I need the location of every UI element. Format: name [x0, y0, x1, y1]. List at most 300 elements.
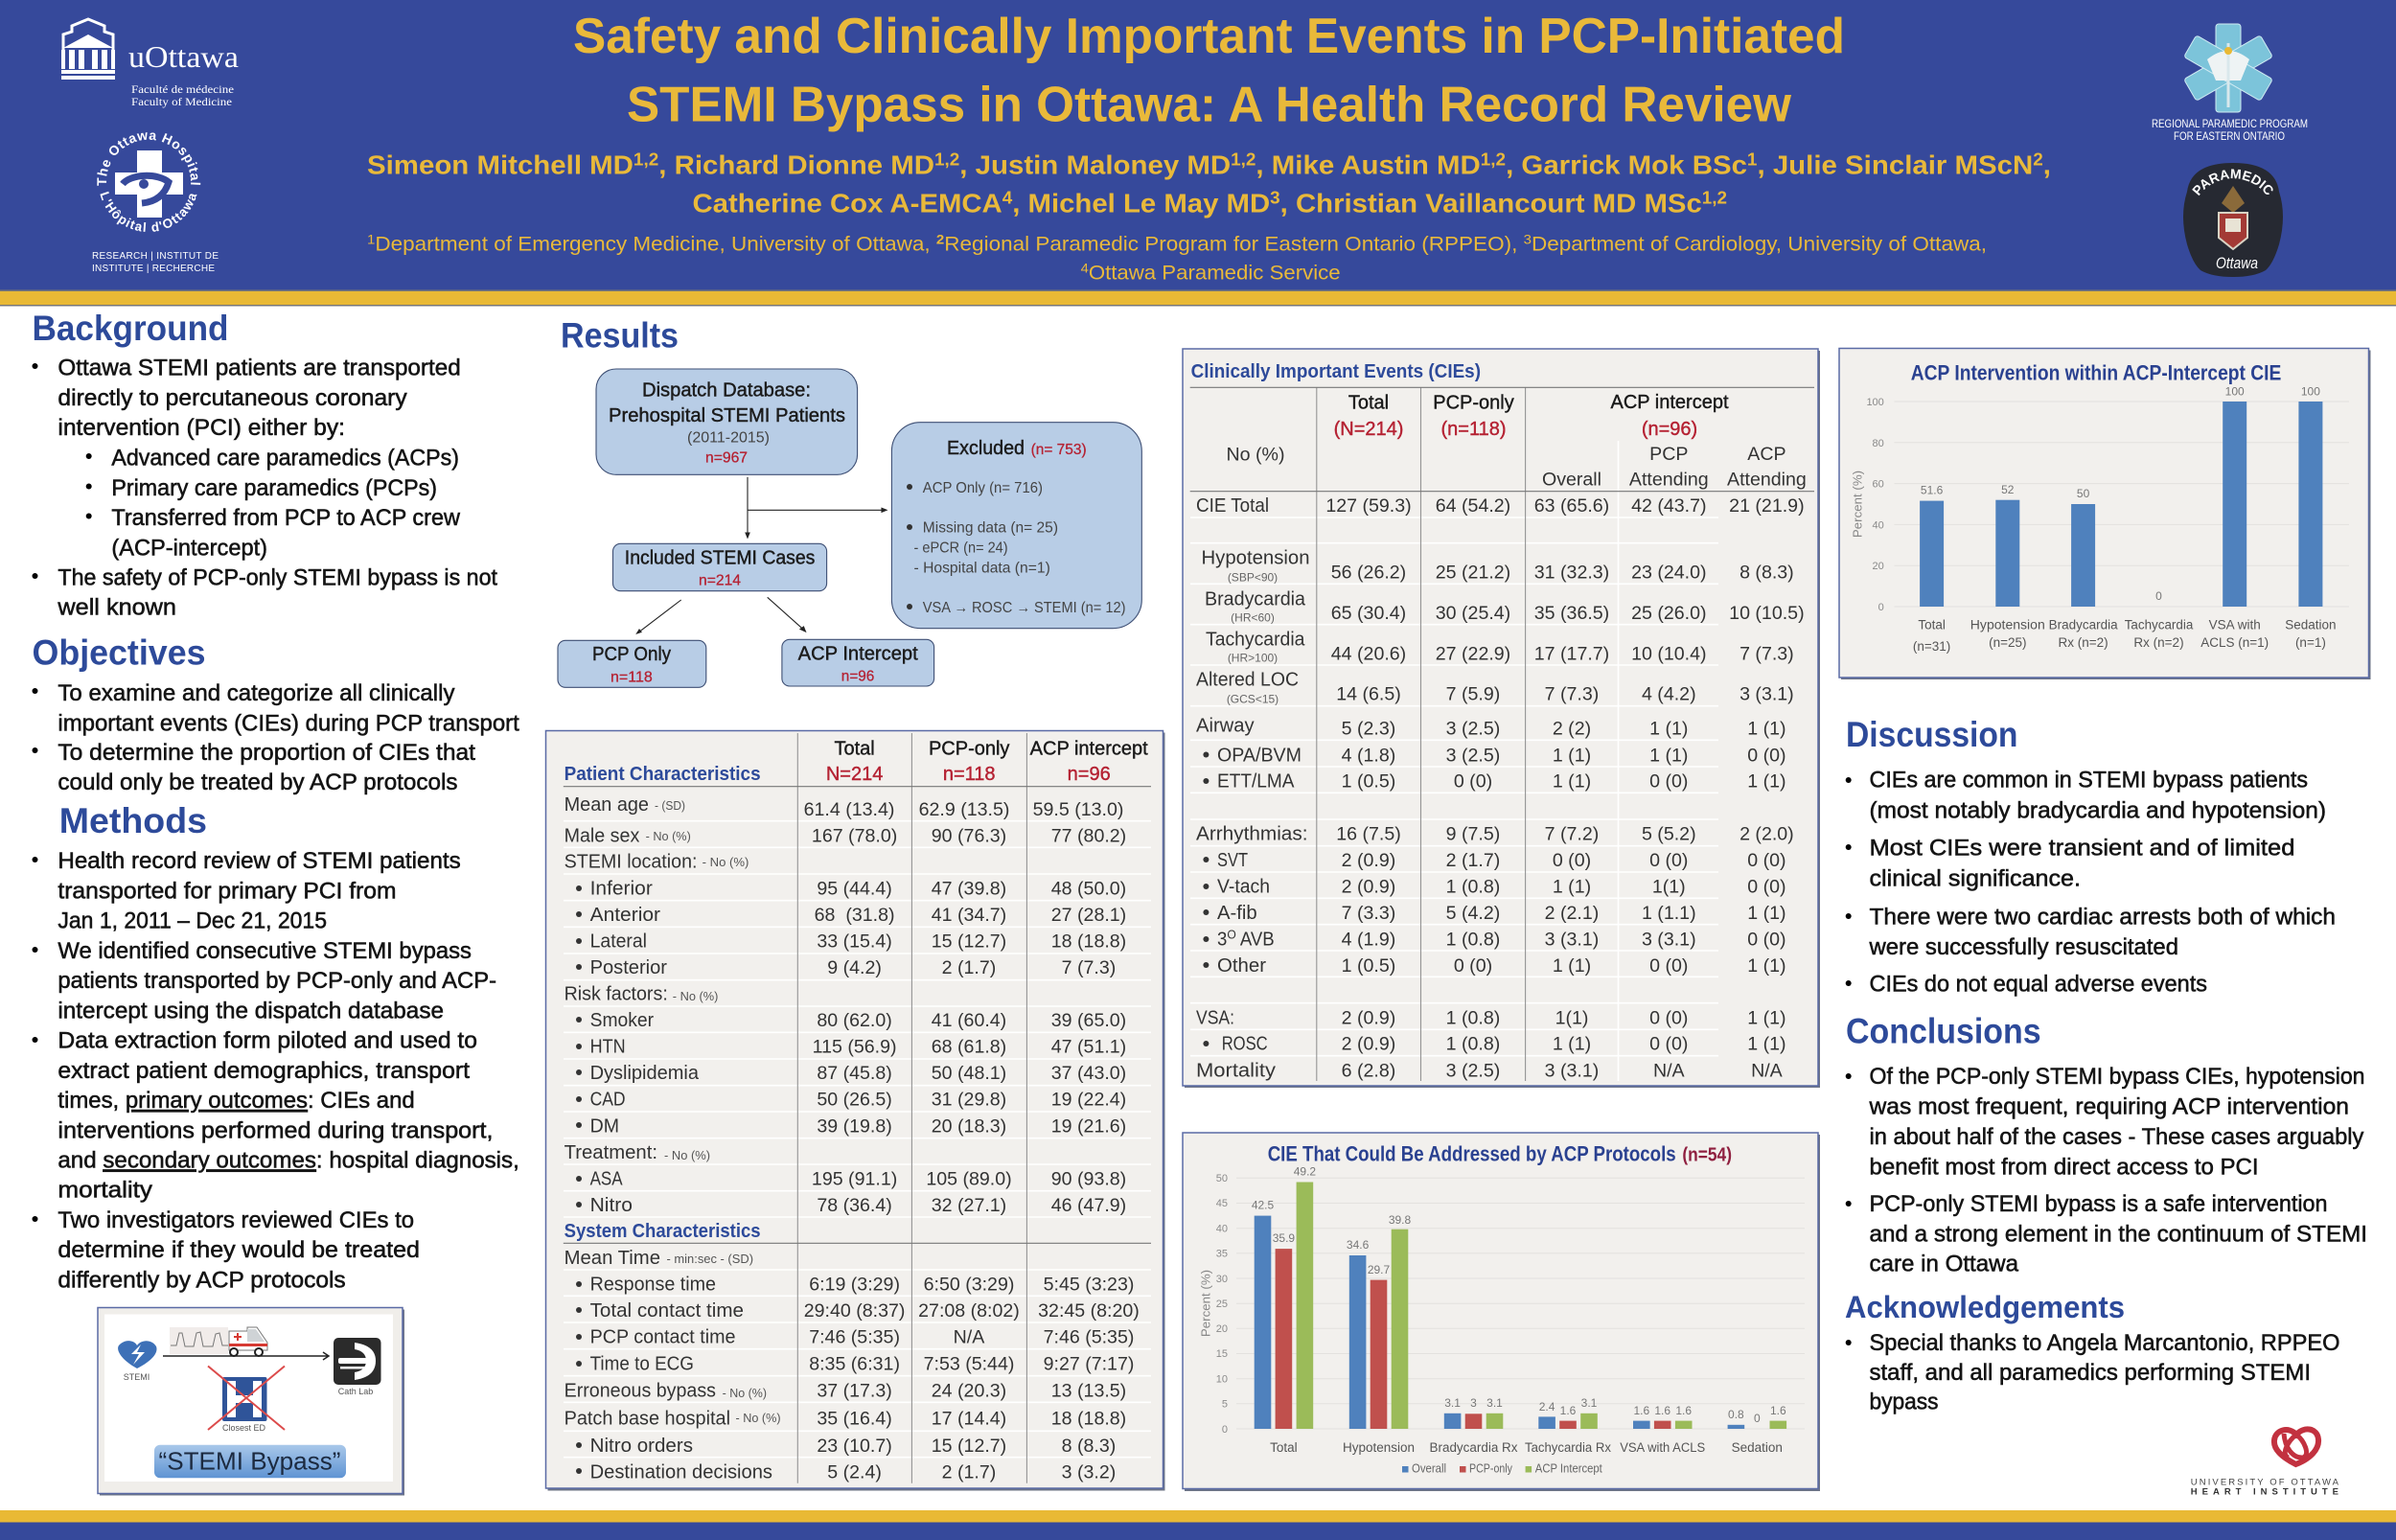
rows: VSA and mortality: 1 (0.8): [1446, 1034, 1500, 1055]
rows: VSA and mortality: 1 (0.8): [1446, 1007, 1500, 1028]
rows: VSA and mortality: 2 (0.9): [1342, 1034, 1395, 1055]
text block: background bullets: The safety of PCP-only STEMI bypass is not: [58, 565, 497, 591]
rows: VSA and mortality: 1 (1): [1553, 1034, 1591, 1055]
rows: risk factors: 37 (43.0): [1051, 1063, 1126, 1084]
rows: mean time: PCP contact time: [590, 1327, 736, 1348]
rows: arrhythmias: 0 (0): [1747, 850, 1786, 871]
rows: airway: 1 (1): [1649, 745, 1688, 766]
rows: VSA and mortality: [1196, 1007, 1786, 1081]
icon: ECG strip: [170, 1327, 228, 1354]
rows: bypass and patch: 37 (17.3): [817, 1380, 892, 1401]
rows: VSA and mortality: 6 (2.8): [1342, 1060, 1395, 1081]
text block: objectives bullets: [33, 680, 519, 795]
data labels: 3.1: [1486, 1396, 1503, 1410]
rows: vital sign events: 27 (22.9): [1436, 643, 1510, 664]
rows: airway: 0 (0): [1649, 771, 1688, 793]
affiliations: [367, 232, 1987, 285]
data labels: 3.1: [1444, 1396, 1461, 1410]
text block: discussion bullets: CIEs do not equal adverse events: [1869, 971, 2207, 997]
rows: demographics: 77 (80.2): [1051, 825, 1126, 846]
rows: VSA and mortality: VSA:: [1196, 1007, 1234, 1028]
y axis labels: 20: [1216, 1323, 1228, 1335]
icon: broken heart: STEMI: [124, 1372, 150, 1382]
rows: vital sign events: 7 (7.3): [1739, 643, 1794, 664]
rows: vital sign events: 3 (3.1): [1739, 684, 1794, 705]
rows: vital sign events: 30 (25.4): [1436, 603, 1510, 624]
text block: objectives bullets: could only be treated by ACP protocols: [58, 770, 458, 795]
rows: bypass and patch: 15 (12.7): [932, 1436, 1006, 1457]
rows: demographics: 62.9 (13.5): [919, 799, 1009, 820]
table header: ACP intercept: [1030, 738, 1148, 759]
logo: regional paramedic program star of life: [2152, 24, 2308, 143]
bars: ACP intercept: [1297, 1183, 1786, 1429]
legend: Overall: [1412, 1461, 1446, 1476]
logo: The Ottawa Hospital: The Ottawa Hospital: [97, 132, 201, 186]
flow box: dispatch database: n=967: [705, 450, 748, 467]
flow box: ACP intercept: n=96: [841, 669, 874, 685]
authors: , Christian Vaillancourt MD MSc: [1280, 189, 1702, 218]
flow box: PCP only: n=118: [611, 670, 653, 686]
authors: 3: [1270, 189, 1280, 208]
rows: STEMI location: Inferior: [590, 878, 653, 899]
rows: VSA and mortality: 1 (1): [1747, 1034, 1786, 1055]
rows: risk factors: 41 (60.4): [932, 1010, 1006, 1031]
rows: STEMI location: Lateral: [590, 931, 647, 953]
table header: Attending: [1727, 470, 1807, 491]
text block: background bullets: Primary care paramedics (PCPs): [111, 475, 437, 501]
data labels: 29.7: [1368, 1263, 1391, 1276]
y axis labels: 100: [1866, 397, 1884, 408]
rows: bypass and patch: [564, 1380, 1126, 1483]
rows: mean time: Total contact time: [590, 1300, 744, 1322]
heading: Conclusions: Conclusions: [1846, 1011, 2041, 1050]
authors: 1,2: [1481, 150, 1506, 170]
rows: arrhythmias: 1 (0.8): [1446, 930, 1500, 951]
authors: 1,2: [634, 150, 658, 170]
heading: system characteristics: System Characteristics: [564, 1221, 761, 1242]
flow box: included STEMI cases: n=214: [699, 573, 741, 589]
rows: airway: 5 (2.3): [1342, 719, 1395, 740]
rows: STEMI location: [564, 852, 1126, 978]
affiliations: 1: [367, 232, 376, 247]
rows: mean time: 6:50 (3:29): [924, 1275, 1014, 1296]
rows: bypass and patch: 18 (18.8): [1051, 1409, 1126, 1430]
rows: vital sign events: 7 (5.9): [1446, 684, 1500, 705]
rows: STEMI location: 15 (12.7): [932, 931, 1006, 953]
rows: arrhythmias: 3 (3.1): [1545, 930, 1599, 951]
rows: airway: 0 (0): [1747, 745, 1786, 766]
rows: risk factors: [564, 983, 1126, 1137]
rows: arrhythmias: 0 (0): [1649, 955, 1688, 977]
authors: , Julie Sinclair MScN: [1757, 150, 2033, 180]
flow box: excluded: Missing data (n= 25): [923, 520, 1058, 537]
text block: methods bullets: transported for primary PCI from: [58, 878, 397, 904]
panel: patient characteristics table: [546, 730, 1165, 1491]
rows: risk factors: DM: [590, 1115, 619, 1137]
data labels: 2.4: [1539, 1400, 1555, 1414]
data labels: 0: [1754, 1412, 1761, 1425]
rows: arrhythmias: 0 (0): [1454, 955, 1492, 977]
y axis labels: 60: [1873, 479, 1884, 491]
heading: clinically important events: Clinically Important Events (CIEs): [1191, 361, 1481, 382]
rows: demographics: 61.4 (13.4): [804, 799, 894, 820]
data labels: 0: [2155, 589, 2162, 603]
table header: PCP-only: [929, 738, 1009, 759]
authors: [367, 150, 2051, 218]
text block: methods bullets: Data extraction form piloted and used to: [58, 1028, 477, 1054]
authors: 1,2: [1231, 150, 1256, 170]
rows: vital sign events: (SBP<90): [1228, 571, 1278, 585]
y axis labels: 5: [1222, 1399, 1228, 1411]
logo: uOttawa: Faculty of Medicine: [131, 95, 232, 108]
rows: vital sign events: (HR>100): [1228, 652, 1278, 665]
text block: acknowledgements: Special thanks to Angela Marcantonio, RPPEO: [1869, 1330, 2340, 1356]
title: [573, 9, 1845, 133]
flow box: dispatch database: Prehospital STEMI Patients: [609, 405, 845, 426]
flow box: dispatch database: (2011-2015): [687, 430, 770, 447]
rows: bypass and patch: 23 (10.7): [817, 1436, 892, 1457]
rows: VSA and mortality: 0 (0): [1649, 1007, 1688, 1028]
rows: VSA and mortality: 3 (2.5): [1446, 1060, 1500, 1081]
affiliations: Ottawa Paramedic Service: [1089, 263, 1341, 285]
rows: bypass and patch: Erroneous bypass: [564, 1380, 716, 1401]
authors: , Justin Maloney MD: [959, 150, 1231, 180]
rows: STEMI location: 47 (39.8): [932, 878, 1006, 899]
authors: Catherine Cox A-EMCA: [692, 189, 988, 218]
rows: arrhythmias: [1196, 824, 1794, 977]
text block: methods bullets: [33, 848, 519, 1293]
category labels: Total: [1270, 1440, 1298, 1455]
rows: airway: 4 (1.8): [1342, 745, 1395, 766]
rows: VSA and mortality: 0 (0): [1649, 1034, 1688, 1055]
rows: airway: 1 (0.5): [1342, 771, 1395, 793]
text block: background bullets: directly to percutaneous coronary: [58, 385, 407, 411]
authors: , Michel Le May MD: [1012, 189, 1270, 218]
rows: mean time: 5:45 (3:23): [1044, 1275, 1134, 1296]
data labels: 0.8: [1728, 1408, 1744, 1421]
category labels: (n=1): [2295, 635, 2326, 650]
category labels: Total: [1918, 618, 1946, 632]
category labels: Bradycardia Rx: [1430, 1440, 1518, 1455]
logo: uOttawa: [61, 19, 239, 108]
text block: objectives bullets: important events (CIEs) during PCP transport: [58, 710, 519, 736]
rows: mean time: Time to ECG: [590, 1353, 694, 1374]
text block: discussion bullets: [1846, 768, 2336, 997]
data labels: 52: [2001, 483, 2015, 496]
rows: mean time: 7:46 (5:35): [809, 1327, 900, 1348]
icon: broken heart: [118, 1341, 156, 1382]
rows: bypass and patch: Patch base hospital: [564, 1409, 730, 1430]
rows: mean time: - min:sec - (SD): [667, 1252, 753, 1266]
flow box: ACP intercept: ACP Intercept: [798, 643, 918, 664]
logo: University of Ottawa Heart Institute: [2191, 1429, 2339, 1497]
rows: mean time: 7:46 (5:35): [1044, 1327, 1134, 1348]
rows: airway: 3 (2.5): [1446, 745, 1500, 766]
authors: Simeon Mitchell MD: [367, 150, 620, 180]
rows: vital sign events: 4 (4.2): [1642, 684, 1696, 705]
arrow: to cath lab: [163, 1352, 329, 1360]
text block: background bullets: Advanced care paramedics (ACPs): [111, 445, 459, 471]
y axis labels: [1198, 1173, 1228, 1436]
authors: , Mike Austin MD: [1256, 150, 1481, 180]
rows: STEMI location: Anterior: [590, 905, 660, 926]
logo: uOttawa: uOttawa: [128, 39, 239, 74]
rows: demographics: 90 (76.3): [932, 825, 1006, 846]
rows: treatment: 46 (47.9): [1051, 1195, 1126, 1216]
y axis labels: 15: [1216, 1348, 1228, 1360]
rows: treatment: ASA: [590, 1169, 623, 1190]
rows: vital sign events: 44 (20.6): [1331, 643, 1406, 664]
flow box: excluded: - ePCR (n= 24): [914, 540, 1008, 557]
flow box: excluded: (n= 753): [1031, 442, 1087, 458]
rows: airway: 1 (1): [1553, 745, 1591, 766]
text block: methods bullets: intercept using the dispatch database: [58, 998, 444, 1023]
flow box: PCP only: PCP Only: [592, 644, 671, 665]
legend: PCP-only: [1469, 1461, 1512, 1476]
category labels: ACLS (n=1): [2200, 635, 2269, 650]
table header: (n=96): [1642, 419, 1697, 440]
icon: crossed-out closest ED: Closest ED: [222, 1423, 266, 1433]
rows: treatment: Treatment:: [564, 1142, 657, 1163]
rows: mean time: Response time: [590, 1275, 716, 1296]
header gold stripe: [0, 289, 2396, 307]
text block: conclusions bullets: Of the PCP-only STEMI bypass CIEs, hypotension: [1869, 1064, 2365, 1090]
table header: Overall: [1542, 470, 1601, 491]
rows: risk factors: 115 (56.9): [813, 1037, 897, 1058]
rows: risk factors: 20 (18.3): [932, 1115, 1006, 1137]
rows: arrhythmias: 3 (3.1): [1642, 930, 1696, 951]
rows: arrhythmias: 16 (7.5): [1336, 824, 1401, 845]
panel: CIE that could be addressed by ACP protocols chart: [1183, 1133, 1820, 1491]
rows: bypass and patch: Destination decisions: [590, 1461, 772, 1483]
authors: , Garrick Mok BSc: [1506, 150, 1747, 180]
panel: STEMI bypass diagram: [98, 1307, 404, 1495]
rows: demographics: - (SD): [655, 798, 685, 813]
rows: treatment: 32 (27.1): [932, 1195, 1006, 1216]
y axis labels: 50: [1216, 1173, 1228, 1184]
rows: mean time: [564, 1248, 1140, 1374]
rows: STEMI location: - No (%): [703, 855, 749, 869]
rows: VSA and mortality: 3 (3.1): [1545, 1060, 1599, 1081]
rows: treatment: 78 (36.4): [817, 1195, 892, 1216]
text block: methods bullets: interventions performed during transport,: [58, 1117, 494, 1143]
table header: Attending: [1629, 470, 1709, 491]
rows: mean time: 27:08 (8:02): [918, 1300, 1020, 1322]
rows: vital sign events: 65 (30.4): [1331, 603, 1406, 624]
table header: (n=118): [1440, 419, 1507, 440]
rows: bypass and patch: 24 (20.3): [932, 1380, 1006, 1401]
data labels: 1.6: [1560, 1404, 1577, 1417]
data labels: 51.6: [1921, 484, 1944, 497]
category labels: Tachycardia Rx: [1525, 1440, 1611, 1455]
rows: treatment: 90 (93.8): [1051, 1169, 1126, 1190]
rows: bypass and patch: 8 (8.3): [1062, 1436, 1116, 1457]
arrow: to excluded: [748, 508, 887, 512]
footer gold stripe: [0, 1510, 2396, 1522]
rows: STEMI location: 18 (18.8): [1051, 931, 1126, 953]
rows: risk factors: 68 (61.8): [932, 1037, 1006, 1058]
flow box: excluded: [891, 423, 1141, 629]
logo: University of Ottawa Heart Institute: UNIVERSITY OF OTTAWA: [2191, 1477, 2339, 1487]
rows: airway: Airway: [1196, 715, 1255, 736]
text block: acknowledgements: staff, and all paramedics performing STEMI: [1869, 1360, 2311, 1386]
authors: ,: [2043, 150, 2051, 180]
rows: bypass and patch: 35 (16.4): [817, 1409, 892, 1430]
rows: arrhythmias: 2 (0.9): [1342, 877, 1395, 898]
rows: STEMI location: 9 (4.2): [827, 957, 882, 978]
rows: airway: [1196, 715, 1786, 793]
text block: methods bullets: Health record review of STEMI patients: [58, 848, 461, 874]
flow box: PCP only: [558, 640, 706, 687]
logo: The Ottawa Hospital: L'Hôpital d'Ottawa: [100, 192, 197, 232]
rows: arrhythmias: 9 (7.5): [1446, 824, 1500, 845]
rows: VSA and mortality: N/A: [1653, 1060, 1686, 1081]
text block: methods bullets: times, primary outcomes: CIEs and: [58, 1088, 415, 1114]
rows: vital sign events: 7 (7.3): [1545, 684, 1599, 705]
y axis labels: 20: [1873, 561, 1884, 572]
rows: treatment: Nitro: [590, 1195, 633, 1216]
rows: vital sign events: 25 (21.2): [1436, 562, 1510, 583]
y axis labels: [1850, 397, 1884, 613]
text block: conclusions bullets: PCP-only STEMI bypass is a safe intervention: [1869, 1191, 2327, 1217]
rows: airway: ETT/LMA: [1217, 771, 1295, 793]
text block: methods bullets: and secondary outcomes: hospital diagnosis,: [58, 1147, 519, 1173]
rows: risk factors: Smoker: [590, 1010, 654, 1031]
table header: [1227, 392, 1807, 491]
flow box: excluded: VSA → ROSC → STEMI (n= 12): [923, 600, 1125, 616]
category labels: Rx (n=2): [2133, 635, 2184, 650]
row: CIE total: [1196, 495, 1805, 517]
text block: methods bullets: Jan 1, 2011 – Dec 21, 2015: [58, 908, 327, 933]
text block: discussion bullets: (most notably bradycardia and hypotension): [1869, 797, 2326, 823]
rows: bypass and patch: - No (%): [723, 1386, 767, 1400]
data labels: [1252, 1165, 1786, 1425]
authors: , Richard Dionne MD: [658, 150, 934, 180]
title: STEMI Bypass in Ottawa: A Health Record Review: [627, 78, 1792, 133]
text block: background bullets: Ottawa STEMI patients are transported: [58, 355, 461, 380]
rows: risk factors: 39 (19.8): [817, 1115, 892, 1137]
rows: arrhythmias: V-tach: [1217, 877, 1270, 898]
rows: STEMI location: STEMI location:: [564, 852, 698, 873]
rows: vital sign events: [1196, 547, 1805, 705]
rows: arrhythmias: 2 (0.9): [1342, 850, 1395, 871]
category labels: [1913, 618, 2337, 654]
rows: airway: 0 (0): [1454, 771, 1492, 793]
category labels: (n=31): [1913, 639, 1950, 654]
bars: PCP-only: [1276, 1249, 1671, 1429]
text block: background bullets: intervention (PCI) either by:: [58, 415, 345, 441]
flow box: included STEMI cases: Included STEMI Cases: [625, 547, 815, 568]
logo: regional paramedic program star of life: REGIONAL PARAMEDIC PROGRAM: [2152, 119, 2308, 130]
logo: Ottawa paramedic badge: Ottawa: [2216, 254, 2258, 272]
affiliations: Regional Paramedic Program for Eastern Ontario (RPPEO),: [944, 234, 1524, 256]
rows: bypass and patch: 3 (3.2): [1062, 1461, 1116, 1483]
rows: arrhythmias: 1 (0.8): [1446, 877, 1500, 898]
rows: arrhythmias: 4 (1.9): [1342, 930, 1395, 951]
text block: methods bullets: extract patient demographics, transport: [58, 1058, 470, 1084]
category labels: Hypotension: [1343, 1440, 1415, 1455]
text block: conclusions bullets: benefit most from direct access to PCI: [1869, 1154, 2259, 1180]
rows: arrhythmias: 0 (0): [1553, 850, 1591, 871]
rows: arrhythmias: 3: [1217, 930, 1228, 951]
affiliations: Department of Cardiology, University of Ottawa,: [1532, 234, 1987, 256]
text block: methods bullets: determine if they would be treated: [58, 1237, 420, 1263]
rows: arrhythmias: 1(1): [1652, 877, 1686, 898]
y axis labels: 10: [1216, 1374, 1228, 1386]
data labels: 42.5: [1252, 1199, 1275, 1212]
rows: arrhythmias: 1 (1): [1553, 877, 1591, 898]
text block: conclusions bullets: and a strong element in the continuum of STEMI: [1869, 1221, 2367, 1247]
data labels: 100: [2225, 384, 2245, 398]
y axis labels: 0: [1878, 602, 1884, 613]
y axis labels: Percent (%): [1198, 1270, 1213, 1337]
legend: ACP Intercept: [1535, 1461, 1602, 1476]
logo: The Ottawa Hospital: INSTITUTE | RECHERCHE: [92, 264, 215, 274]
rows: arrhythmias: 0 (0): [1649, 850, 1688, 871]
table header: (N=214): [1334, 419, 1403, 440]
table header: PCP: [1649, 444, 1688, 465]
heading: Discussion: Discussion: [1846, 715, 2018, 754]
data labels: 3: [1470, 1396, 1477, 1410]
rows: demographics: Male sex: [564, 825, 639, 846]
legend: [1402, 1461, 1602, 1476]
rows: bypass and patch: 5 (2.4): [827, 1461, 882, 1483]
rows: mean time: Mean Time: [564, 1248, 660, 1269]
rows: treatment: 105 (89.0): [926, 1169, 1012, 1190]
rows: mean time: 29:40 (8:37): [804, 1300, 905, 1322]
rows: airway: 1 (1): [1747, 771, 1786, 793]
affiliations: 2: [936, 232, 944, 247]
rows: vital sign events: 56 (26.2): [1331, 562, 1406, 583]
text block: background bullets: Transferred from PCP to ACP crew: [111, 505, 461, 531]
rows: bypass and patch: 17 (14.4): [932, 1409, 1006, 1430]
rows: demographics: 167 (78.0): [812, 825, 897, 846]
rows: mean time: 9:27 (7:17): [1044, 1353, 1134, 1374]
rows: arrhythmias: 1 (1.1): [1642, 903, 1696, 924]
rows: risk factors: 47 (51.1): [1051, 1037, 1126, 1058]
y axis labels: Percent (%): [1850, 471, 1865, 538]
y axis labels: 45: [1216, 1198, 1228, 1209]
flow box: ACP intercept: [782, 639, 934, 686]
chart title: CIE That Could Be Addressed by ACP Protocols: [1268, 1142, 1676, 1166]
label: STEMI Bypass button: “STEMI Bypass”: [159, 1447, 341, 1476]
icon: ambulance: [229, 1327, 267, 1356]
category labels: VSA with: [2209, 618, 2261, 632]
heading: Acknowledgements: Acknowledgements: [1845, 1290, 2125, 1324]
row: CIE total: 21 (21.9): [1729, 495, 1805, 517]
table header: Total: [1348, 393, 1389, 414]
flow box: included STEMI cases: [613, 543, 827, 591]
chart title: ACP Intervention within ACP-Intercept CIE: [1911, 361, 2281, 385]
rows: vital sign events: (HR<60): [1231, 610, 1275, 624]
table header: No (%): [1227, 445, 1284, 466]
arrow: dispatch to included: [746, 477, 749, 538]
authors: 2: [2033, 150, 2043, 170]
rows: airway: 3 (2.5): [1446, 719, 1500, 740]
text block: objectives bullets: To examine and categorize all clinically: [58, 680, 455, 706]
logo: regional paramedic program star of life: FOR EASTERN ONTARIO: [2174, 131, 2285, 143]
rows: risk factors: 80 (62.0): [817, 1010, 892, 1031]
rows: demographics: [564, 794, 1126, 846]
rows: VSA and mortality: N/A: [1751, 1060, 1784, 1081]
rows: airway: 1 (1): [1747, 719, 1786, 740]
footer band: [0, 1522, 2396, 1540]
rows: arrhythmias: A-fib: [1217, 903, 1257, 924]
rows: VSA and mortality: ROSC: [1222, 1034, 1268, 1055]
rows: VSA and mortality: 1 (1): [1747, 1007, 1786, 1028]
rows: arrhythmias: 1 (1): [1747, 903, 1786, 924]
rows: treatment: 195 (91.1): [812, 1169, 897, 1190]
